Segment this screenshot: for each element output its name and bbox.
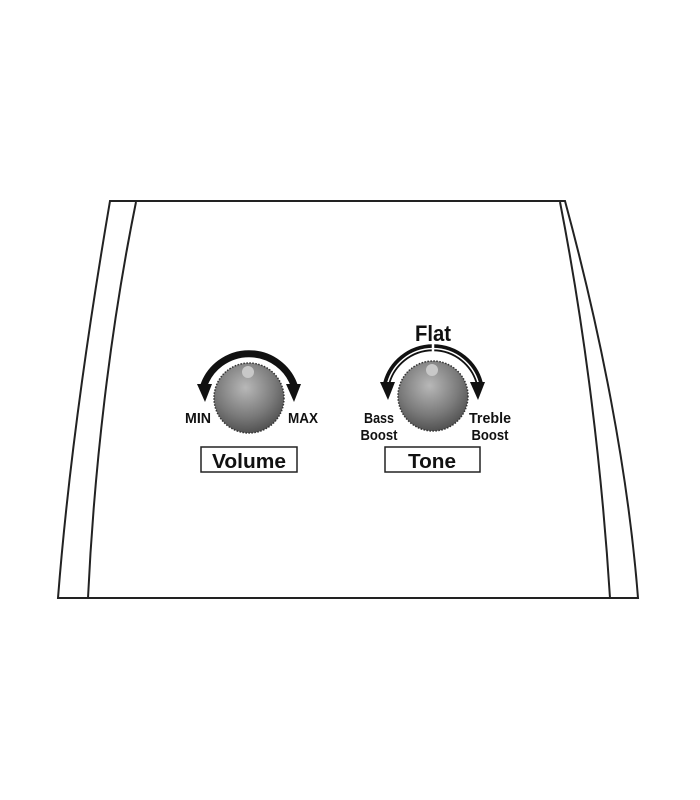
volume label box: Volume bbox=[212, 451, 286, 473]
volume knob bbox=[185, 354, 318, 433]
tone knob bbox=[360, 321, 511, 444]
label Bass Boost: Bass bbox=[364, 410, 394, 427]
label Flat: Flat bbox=[415, 321, 452, 346]
tone label box: Tone bbox=[408, 451, 456, 473]
volume label box bbox=[201, 447, 297, 473]
label MAX: MAX bbox=[288, 410, 318, 427]
label Treble Boost: Treble bbox=[469, 410, 511, 427]
label Treble Boost: Boost bbox=[472, 427, 508, 444]
label MIN: MIN bbox=[185, 410, 211, 427]
device body bbox=[58, 201, 638, 598]
label Bass Boost: Boost bbox=[360, 427, 398, 444]
tone label box bbox=[385, 447, 480, 473]
